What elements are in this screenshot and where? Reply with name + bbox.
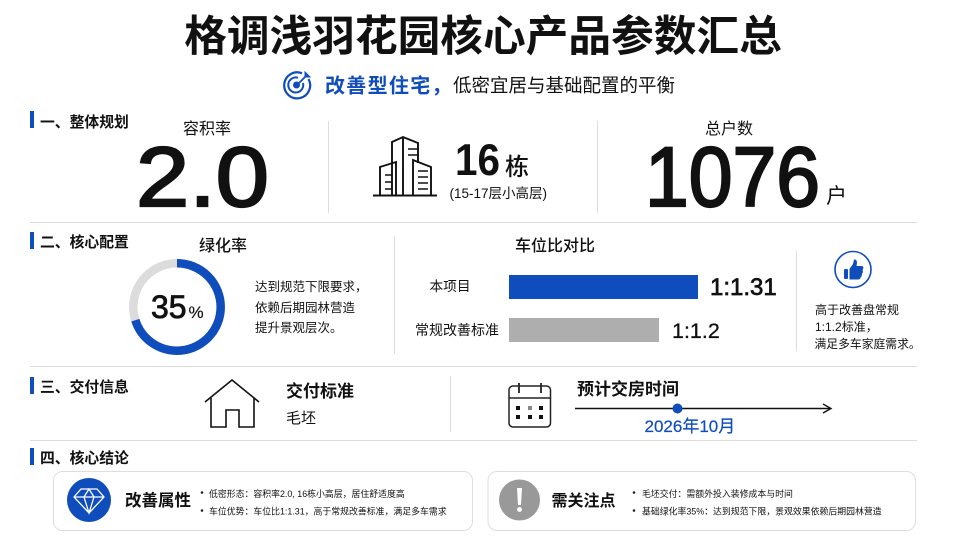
section heading: 核心结论: 四、核心结论 <box>40 449 129 467</box>
donut chart: greening rate <box>133 237 247 351</box>
delivery timeline: 预计交房时间 <box>577 379 679 399</box>
stat: buildings: (15-17层小高层) <box>450 185 547 201</box>
parking note: 1:1.2标准， <box>815 320 878 334</box>
parking note <box>814 302 921 351</box>
bar chart: parking ratio: 车位比对比 <box>515 236 595 255</box>
bar chart: parking ratio: 1:1.2 <box>672 319 720 343</box>
parking note: 满足多车家庭需求。 <box>814 337 921 351</box>
icon: target <box>284 72 310 98</box>
stat: households: 1076 <box>645 130 820 224</box>
title: 格调浅羽花园核心产品参数汇总 <box>184 13 782 61</box>
card: caution points: 毛坯交付：需额外投入装修成本与时间 <box>642 488 793 499</box>
icon: warning <box>499 480 540 520</box>
subtitle highlight: 改善型住宅， <box>325 74 453 98</box>
subtitle <box>284 72 675 98</box>
stat: households: 户 <box>826 185 847 208</box>
card: improvement attributes: 改善属性 <box>125 491 191 510</box>
bar chart: parking ratio <box>415 236 777 343</box>
bar chart: parking ratio: 本项目 <box>429 279 471 294</box>
delivery standard: 毛坯 <box>286 410 316 427</box>
greening description: 达到规范下限要求， <box>255 279 368 294</box>
card: improvement attributes: 车位优势：车位比1:1.31，高于常规改善标准，满足多车需求 <box>209 506 447 516</box>
delivery standard: 交付标准 <box>286 381 354 401</box>
delivery standard <box>286 381 354 427</box>
section heading: 核心配置: 二、核心配置 <box>40 233 129 251</box>
icon: calendar <box>509 383 550 427</box>
card: caution points: 基础绿化率35%：达到规范下限，景观效果依赖后期园林营造 <box>642 506 882 516</box>
stat: plot ratio: 容积率 <box>183 120 231 138</box>
card: improvement attributes: 低密形态：容积率2.0, 16栋小高层，居住舒适度高 <box>209 488 405 499</box>
icon: buildings <box>373 137 437 196</box>
donut chart: greening rate: 35 <box>151 289 187 325</box>
stat: buildings: 16 <box>455 136 500 185</box>
stat: plot ratio: 2.0 <box>136 130 269 224</box>
donut chart: greening rate: 绿化率 <box>199 237 247 255</box>
parking note: 高于改善盘常规 <box>815 302 899 317</box>
icon: diamond <box>67 478 111 522</box>
greening description: 提升景观层次。 <box>255 320 343 335</box>
card: improvement attributes <box>54 472 472 530</box>
bar chart: parking ratio: 1:1.31 <box>710 274 777 301</box>
greening description <box>255 279 368 335</box>
greening description: 依赖后期园林营造 <box>255 300 356 315</box>
card: caution points <box>488 472 916 530</box>
donut chart: greening rate: % <box>188 303 204 322</box>
section heading: 交付信息: 三、交付信息 <box>40 378 129 396</box>
icon: house <box>205 380 259 427</box>
icon: thumbs up <box>835 252 871 288</box>
section heading: 整体规划: 一、整体规划 <box>40 113 129 131</box>
subtitle text: 低密宜居与基础配置的平衡 <box>453 75 675 96</box>
card: caution points: 需关注点 <box>552 491 616 510</box>
stat: households: 总户数 <box>705 120 753 138</box>
stat: buildings <box>373 136 547 201</box>
bar chart: parking ratio: 常规改善标准 <box>415 322 499 338</box>
delivery timeline <box>575 379 831 436</box>
delivery timeline: 2026年10月 <box>644 417 735 436</box>
stat: buildings: 栋 <box>505 154 529 181</box>
